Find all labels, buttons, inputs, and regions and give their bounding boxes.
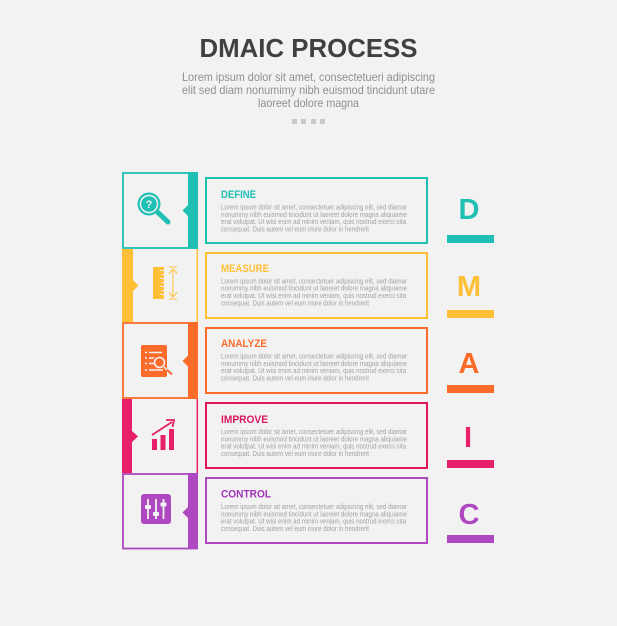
card: analyze: erat volutpat. Ut wisi enim ad minim veniam, quis nostrud exerci sita: [221, 367, 406, 375]
card: define: nonummy nibh euismod tincidunt ut laoreet dolore magna aliquiame: [221, 211, 407, 219]
icon: sliders: [141, 494, 171, 524]
card: measure: consequat. Duis autem vel eum iriure dolor in hendrerit: [221, 299, 369, 307]
step 2: measure: [122, 249, 494, 322]
card: measure: [206, 253, 427, 318]
card: define: erat volutpat. Ut wisi enim ad minim veniam, quis nostrud exerci sita: [221, 218, 406, 226]
title: DMAIC PROCESS: [200, 35, 418, 63]
card: improve: IMPROVE: [221, 414, 268, 426]
card: define: consequat. Duis autem vel eum iriure dolor in hendrerit: [221, 226, 369, 234]
card: improve: consequat. Duis autem vel eum iriure dolor in hendrerit: [221, 450, 369, 458]
card: improve: [206, 403, 427, 468]
icon: magnifier with question mark: [138, 192, 168, 222]
step 5: control: [123, 473, 494, 549]
icon panel: analyze: [123, 322, 198, 399]
step 1: define: [123, 172, 494, 249]
card: control: CONTROL: [221, 489, 271, 501]
icon panel: define: [123, 172, 198, 249]
card: measure: MEASURE: [221, 263, 269, 275]
letter: A: A: [459, 348, 480, 380]
card: control: erat volutpat. Ut wisi enim ad minim veniam, quis nostrud exerci sita: [221, 518, 406, 526]
card: improve: Lorem ipsum dolor sit amet, consectetuer adipiscing elit, sed diamar: [221, 428, 408, 436]
card: improve: erat volutpat. Ut wisi enim ad minim veniam, quis nostrud exerci sita: [221, 443, 406, 451]
letter: A: [447, 348, 494, 393]
card: control: consequat. Duis autem vel eum iriure dolor in hendrerit: [221, 525, 369, 533]
card: measure: Lorem ipsum dolor sit amet, consectetuer adipiscing elit, sed diamar: [221, 277, 408, 285]
subtitle: elit sed diam nonumimy nibh euismod tincidunt utare: [182, 83, 435, 97]
letter: M: [447, 271, 494, 318]
letter: C: C: [459, 499, 480, 531]
card: analyze: Lorem ipsum dolor sit amet, consectetuer adipiscing elit, sed diamar: [221, 352, 408, 360]
card: analyze: ANALYZE: [221, 338, 267, 350]
card: define: Lorem ipsum dolor sit amet, consectetuer adipiscing elit, sed diamar: [221, 204, 408, 212]
card: control: [206, 478, 427, 543]
subtitle: laoreet dolore magna: [258, 96, 359, 110]
icon panel: control: [123, 473, 198, 549]
card: control: nonummy nibh euismod tincidunt ut laoreet dolore magna aliquiame: [221, 510, 407, 518]
step 4: improve: [122, 399, 494, 473]
card: measure: erat volutpat. Ut wisi enim ad minim veniam, quis nostrud exerci sita: [221, 292, 406, 300]
card: define: [206, 178, 427, 243]
card: control: Lorem ipsum dolor sit amet, consectetuer adipiscing elit, sed diamar: [221, 503, 408, 511]
icon: ruler and arrow: [153, 267, 177, 299]
card: analyze: [206, 328, 427, 393]
icon: report with magnifier: [141, 345, 172, 377]
card: improve: nonummy nibh euismod tincidunt ut laoreet dolore magna aliquiame: [221, 435, 407, 443]
icon: growth chart: [152, 420, 174, 450]
subtitle: [182, 70, 435, 110]
subtitle: Lorem ipsum dolor sit amet, consectetueri adipiscing: [182, 70, 435, 84]
card: analyze: consequat. Duis autem vel eum iriure dolor in hendrerit: [221, 374, 369, 382]
letter: D: D: [459, 194, 479, 226]
icon panel: improve: [122, 399, 197, 473]
letter: M: M: [457, 271, 481, 303]
icon: magnifier with question mark: ?: [146, 199, 153, 211]
letter: I: I: [464, 422, 472, 454]
icon panel: measure: [122, 249, 197, 322]
letter: C: [447, 499, 494, 543]
decorative dots: [292, 119, 325, 124]
card: analyze: nonummy nibh euismod tincidunt ut laoreet dolore magna aliquiame: [221, 360, 407, 368]
card: measure: nonummy nibh euismod tincidunt ut laoreet dolore magna aliquiame: [221, 285, 407, 293]
letter: D: [447, 194, 494, 243]
step 3: analyze: [123, 322, 494, 399]
letter: I: [447, 422, 494, 468]
card: define: DEFINE: [221, 189, 256, 201]
